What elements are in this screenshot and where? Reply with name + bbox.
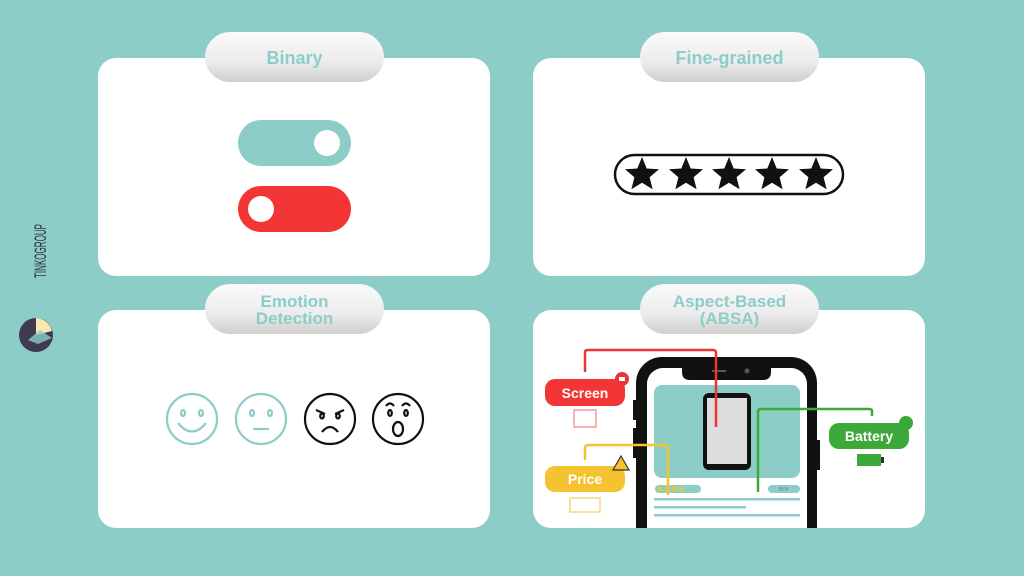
pill: Aspect-Based (ABSA): (ABSA) — [700, 309, 759, 328]
icon: shocked face — [373, 394, 423, 444]
pill: Fine-grained: Fine-grained — [675, 48, 784, 68]
panel: fine-grained — [533, 58, 925, 276]
icon: toggle on — [238, 120, 351, 166]
pill: Emotion Detection — [205, 284, 384, 334]
logo: Tinkogroup — [19, 224, 53, 352]
pill: Binary: Binary — [266, 48, 323, 68]
pill: Emotion Detection: Detection — [256, 309, 333, 328]
icon: angry face — [305, 394, 355, 444]
label: Battery — [829, 416, 913, 466]
label: Price — [545, 456, 629, 512]
illustration: smartphone: BUY — [779, 487, 790, 493]
connector lines — [585, 350, 872, 495]
icon: happy face — [167, 394, 217, 444]
illustration: smartphone — [633, 357, 820, 528]
pill: Aspect-Based (ABSA) — [640, 284, 819, 334]
pill: Binary — [205, 32, 384, 82]
panel: emotion detection — [98, 310, 490, 528]
icon: toggle off — [238, 186, 351, 232]
pill: Emotion Detection: Emotion — [260, 292, 328, 311]
label: Price: Price — [568, 471, 602, 487]
pill: Fine-grained — [640, 32, 819, 82]
panel: binary — [98, 58, 490, 276]
panel: aspect-based — [533, 310, 925, 528]
label: Screen: Screen — [562, 385, 608, 401]
text: TINKOGROUP — [31, 224, 50, 278]
label: Battery: Battery — [845, 428, 893, 444]
icon: five star rating — [615, 155, 843, 194]
label: Screen — [545, 372, 629, 427]
pill: Aspect-Based (ABSA): Aspect-Based — [673, 292, 786, 311]
icon: neutral face — [236, 394, 286, 444]
